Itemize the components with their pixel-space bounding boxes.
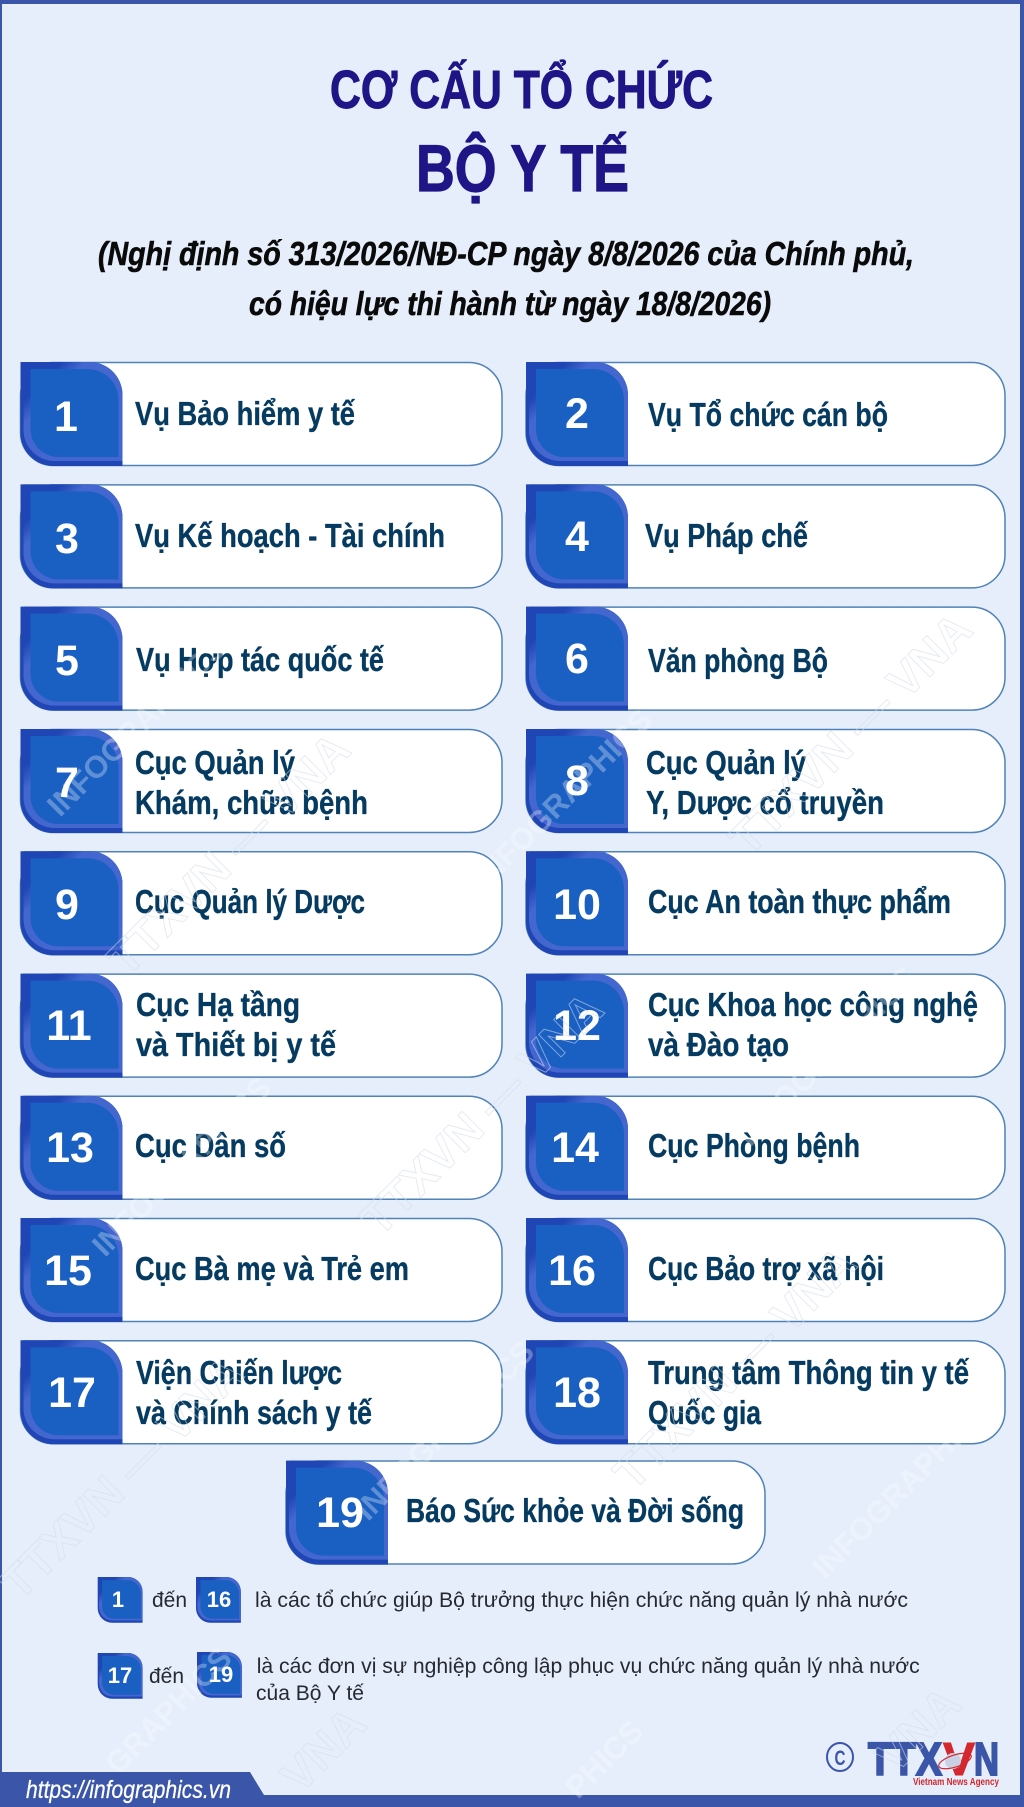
card 16: Cục Bảo trợ xã hội [648,1250,884,1287]
title: BỘ Y TẾ [416,131,629,205]
subtitle [98,235,914,322]
card 11: Cục Hạ tầng [136,986,300,1023]
card 7: Khám, chữa bệnh [135,784,368,821]
watermarks: GRAPHICS [98,1640,239,1781]
card 17: 17 [48,1369,96,1417]
watermarks: INFOGRAPHICS [85,1070,278,1263]
card 17: và Chính sách y tế [136,1394,373,1431]
card 3: Vụ Kế hoạch - Tài chính [135,517,445,554]
card 4 [526,484,1005,588]
card 4: Vụ Pháp chế [645,517,809,554]
card 15: 15 [44,1247,92,1295]
card 9 [20,851,502,955]
subtitle: có hiệu lực thi hành từ ngày 18/8/2026) [249,285,771,322]
logo: TTXVN: TTX [868,1733,942,1785]
card 1 [20,362,502,466]
legend row 1: đến [152,1588,187,1612]
card 15: Cục Bà mẹ và Trẻ em [135,1250,409,1287]
card 14: Cục Phòng bệnh [648,1127,860,1164]
legend row 2: đến [149,1664,184,1688]
watermarks: TTXVN — VNA [719,602,982,865]
card 2: 2 [565,390,589,438]
legend row 2: 19 [209,1662,233,1687]
card 10 [526,851,1005,955]
card 19: Báo Sức khỏe và Đời sống [406,1492,744,1529]
card 9: 9 [55,881,79,929]
card 14 [526,1096,1005,1200]
legend row 2: của Bộ Y tế [256,1681,364,1705]
card 5: Vụ Hợp tác quốc tế [136,641,385,678]
card 6: 6 [565,635,589,683]
logo: TTXVN: N [974,1733,999,1785]
card 5: 5 [55,637,79,685]
card 11: và Thiết bị y tế [136,1026,337,1063]
card 12: và Đào tạo [648,1026,789,1063]
logo: TTXVN: Vietnam News Agency [913,1776,999,1788]
card 18: Trung tâm Thông tin y tế [648,1354,970,1391]
card 16 [526,1218,1005,1322]
card 6 [526,607,1005,711]
card 1: Vụ Bảo hiểm y tế [135,395,356,432]
card 18 [526,1340,1005,1444]
card 8: 8 [565,757,589,805]
card 17 [20,1340,502,1444]
card 7: Cục Quản lý [135,744,296,781]
watermarks: TTXVN — VNA [603,1236,866,1499]
card 10: 10 [553,881,601,929]
watermarks: TTXVN — VNA [97,722,360,985]
card 1: 1 [54,393,78,441]
watermarks: VNA [865,1677,971,1782]
watermarks: INFOGRAPHICS [466,702,659,895]
card 8 [526,729,1005,833]
watermarks: VNA [270,1697,376,1802]
card 6: Văn phòng Bộ [648,642,828,679]
watermarks [0,602,998,1805]
subtitle: (Nghị định số 313/2026/NĐ-CP ngày 8/8/2026 của Chính phủ, [98,235,914,272]
watermarks: TTXVN — VNA [350,982,613,1245]
card 18: 18 [553,1369,601,1417]
card 11 [20,974,502,1078]
logo: TTXVN: C [834,1747,846,1770]
title: CƠ CẤU TỔ CHỨC [330,60,713,120]
footer URL tab [0,1772,1024,1807]
card 7: 7 [55,759,79,807]
card 13: Cục Dân số [135,1127,286,1164]
card 16: 16 [548,1247,596,1295]
card 3: 3 [55,515,79,563]
card 11: 11 [46,1002,92,1050]
legend row 1 [98,1577,908,1623]
card 19 [286,1461,765,1565]
card 15 [20,1218,502,1322]
card 19: 19 [316,1489,364,1537]
card 17: Viện Chiến lược [136,1354,342,1391]
card 14: 14 [551,1124,599,1172]
card 13: 13 [46,1124,94,1172]
watermarks: PHICS [558,1713,650,1805]
legend row 2 [98,1652,920,1705]
watermarks: INFOGRAPHICS [40,630,233,823]
legend row 1: 1 [112,1587,124,1612]
watermarks: INFOGRAPHICS [805,1392,998,1585]
card 10: Cục An toàn thực phẩm [648,883,951,920]
card 3 [20,484,502,588]
card 2: Vụ Tổ chức cán bộ [648,396,888,433]
logo: TTXVN [827,1733,999,1788]
card 12: 12 [553,1002,601,1050]
watermarks: INFOGRAPHICS [730,960,923,1153]
card 18: Quốc gia [648,1394,762,1431]
card 7 [20,729,502,833]
legend row 2: 17 [108,1663,132,1688]
card 12 [526,974,1005,1078]
logo: TTXVN: V [943,1733,975,1785]
card 8: Y, Dược cổ truyền [646,784,884,821]
footer URL tab: https://infographics.vn [26,1776,231,1804]
legend row 1: là các tổ chức giúp Bộ trưởng thực hiện chức năng quản lý nhà nước [255,1588,908,1612]
card 2 [526,362,1005,466]
card 13 [20,1096,502,1200]
card 9: Cục Quản lý Dược [135,883,365,920]
legend row 2: là các đơn vị sự nghiệp công lập phục vụ chức năng quản lý nhà nước [257,1654,920,1678]
card 8: Cục Quản lý [646,744,807,781]
legend row 1: 16 [207,1587,231,1612]
watermarks: INFOGRAPHICS [348,1334,541,1527]
card 5 [20,607,502,711]
title [330,60,713,205]
card 4: 4 [565,513,589,561]
